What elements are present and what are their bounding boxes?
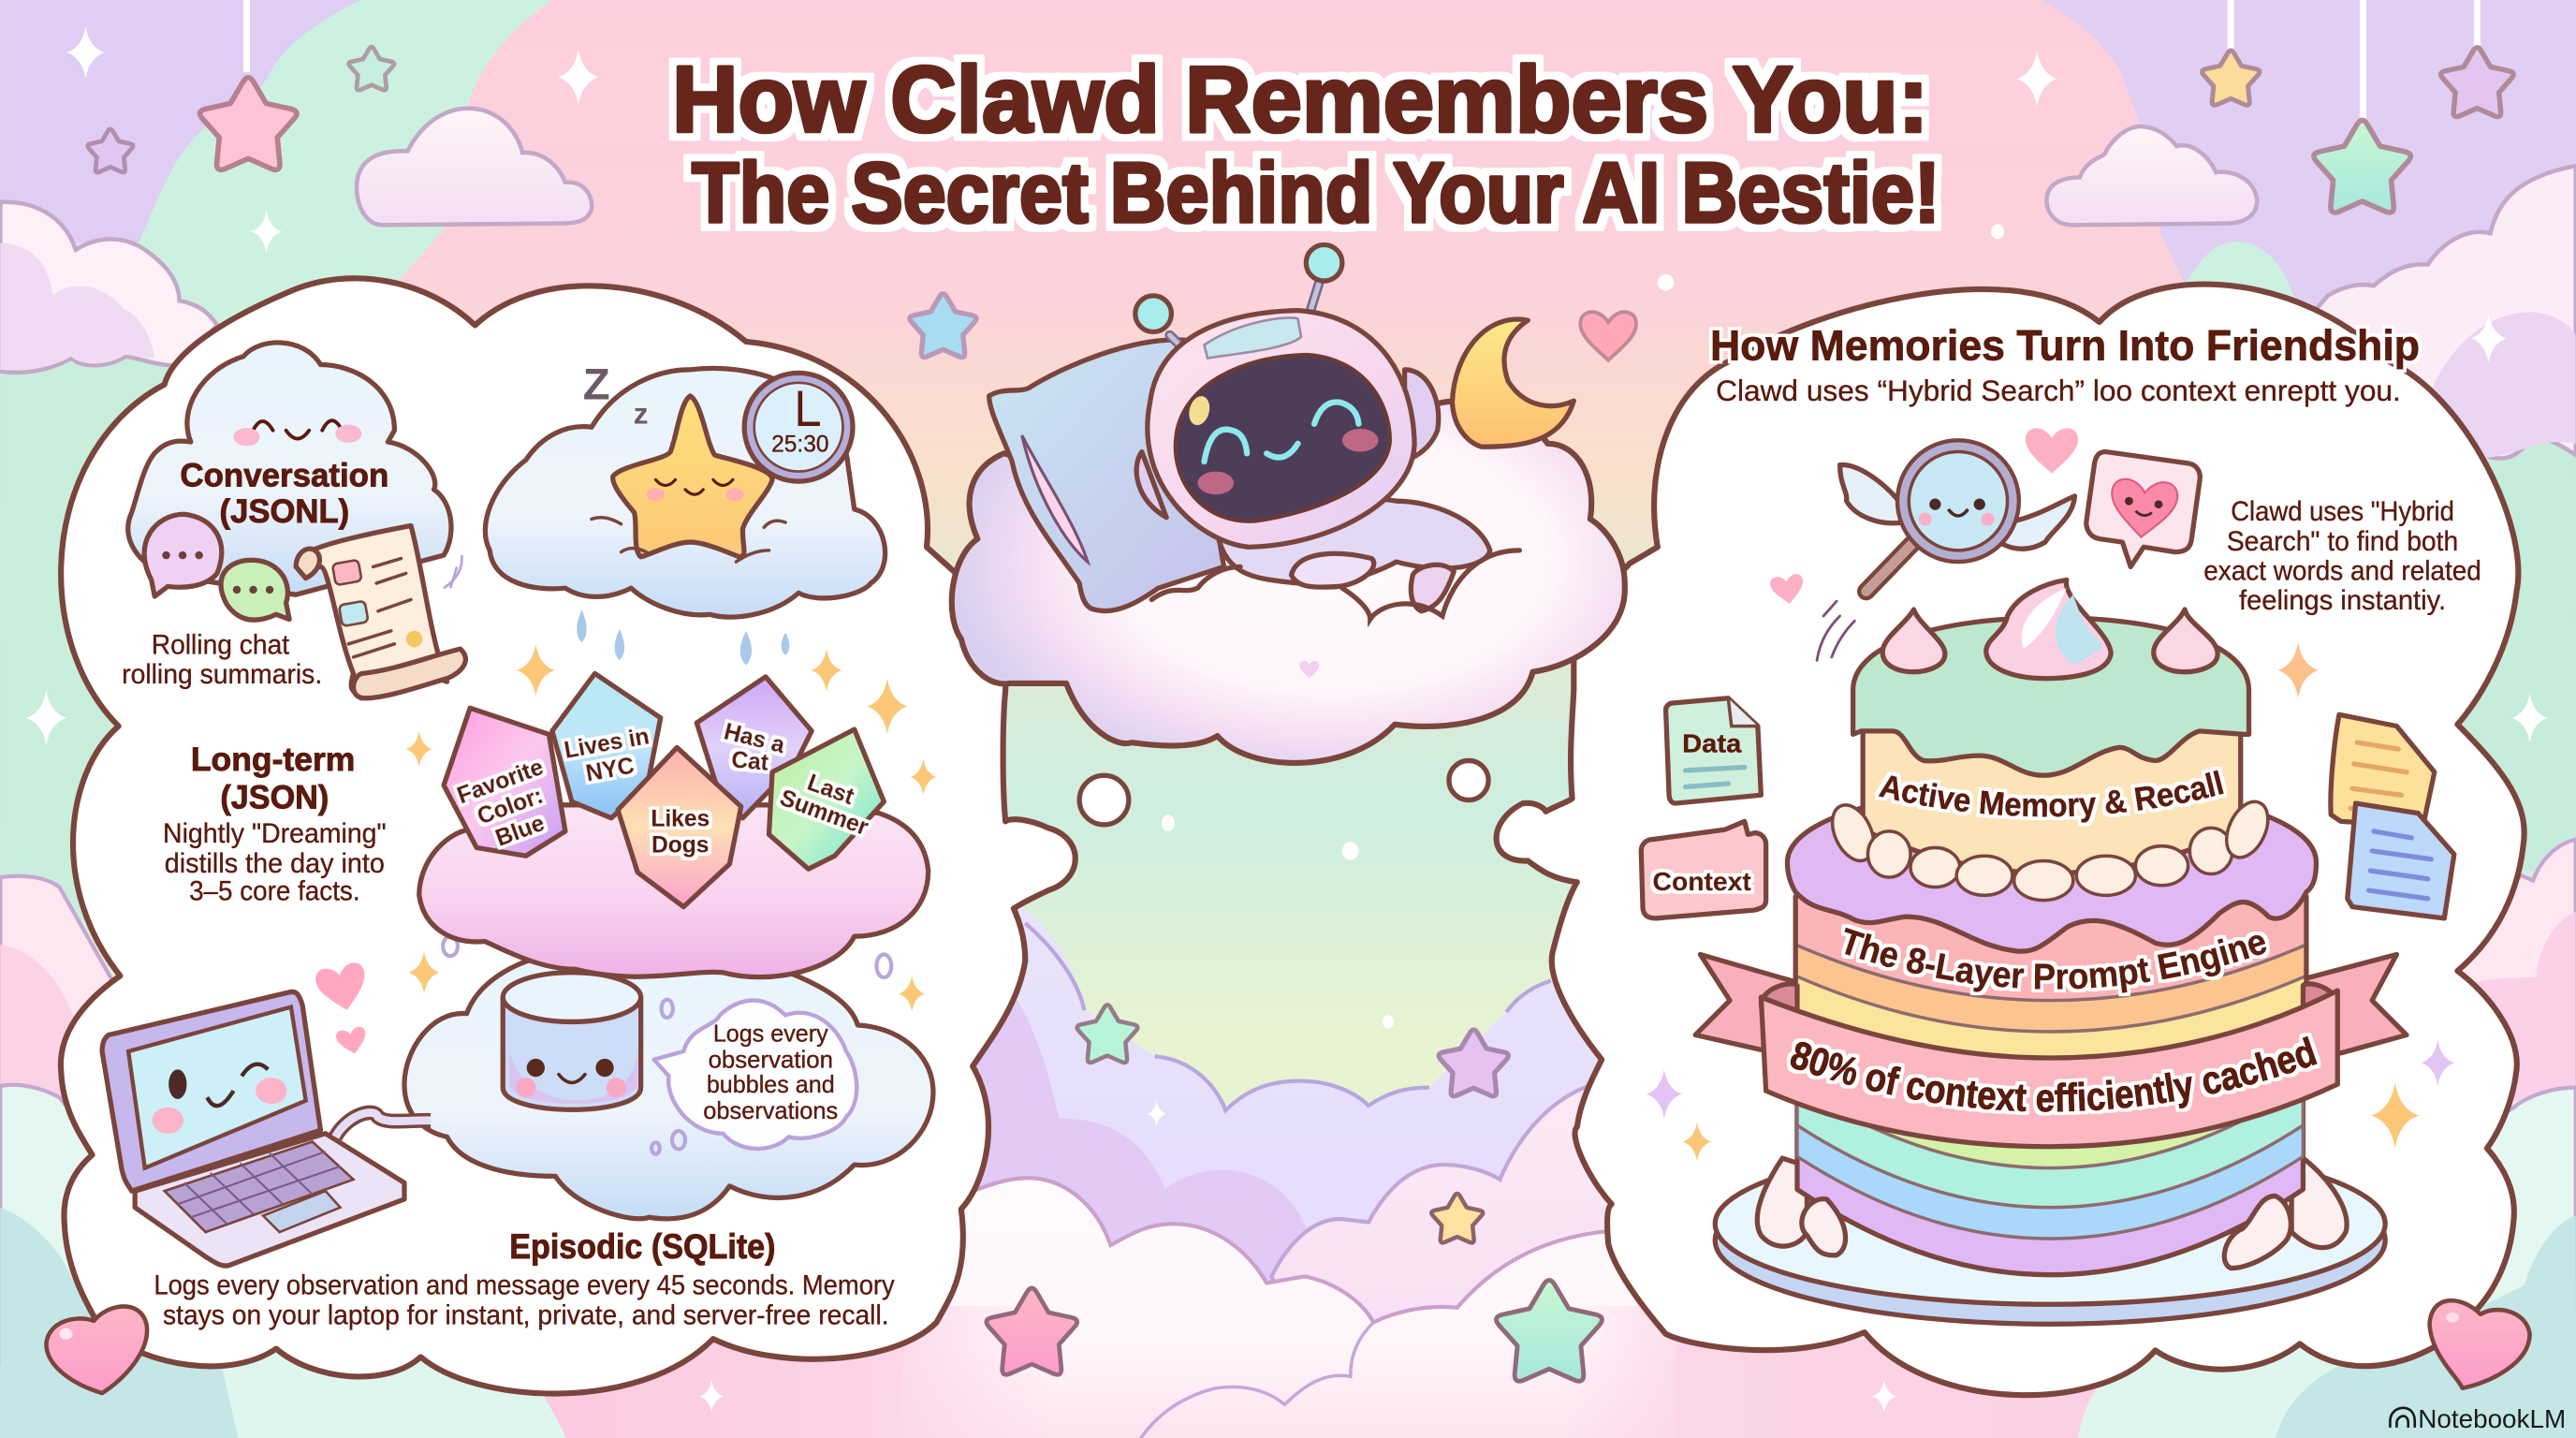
- icon: robot ear: [1136, 370, 1439, 518]
- icon: context bubble: Context: [1653, 867, 1751, 896]
- icon: robot body: [1216, 498, 1490, 611]
- cream tier: [1863, 707, 2241, 873]
- icon: sleep z: [583, 360, 649, 431]
- card: database cloud: [404, 936, 933, 1219]
- icon: clock: 25:30: [771, 433, 829, 458]
- panel: how memories turn into friendship (right thought cloud): [1458, 281, 2532, 1399]
- heading: friendship: How Memories Turn Into Friendship: [1710, 321, 2420, 369]
- icon: yellow document: [2331, 714, 2435, 827]
- text: episodic: Logs every observation and message every 45 seconds. Memory: [154, 1270, 895, 1301]
- text: episodic: [154, 1227, 895, 1330]
- frosting dollops at base: [1802, 1196, 2291, 1269]
- icon: scroll: [296, 526, 465, 698]
- text: episodic: stays on your laptop for instant, private, and server-free recall.: [163, 1299, 889, 1330]
- icon: motion lines: [1817, 601, 1854, 660]
- cake label: prompt engine: The 8-Layer Prompt Engine: [1840, 924, 2270, 996]
- callout: logs bubble: observations: [703, 1098, 838, 1124]
- crystal: has a cat: Has a: [722, 719, 787, 758]
- icon: context bubble: [1641, 821, 1766, 918]
- icon: crescent moon: [1452, 319, 1573, 447]
- icon: bubbles: [443, 936, 891, 1154]
- title: The Secret Behind Your AI Bestie!: [692, 145, 1940, 241]
- sparkles around cake: [1647, 642, 2454, 1162]
- icon: robot antennas: [1135, 244, 1342, 365]
- icon: database cylinder: [503, 973, 641, 1109]
- central bubbles: [1079, 760, 1488, 825]
- sparkles top: [66, 26, 2057, 1028]
- crystal: favorite color blue: Blue: [492, 811, 548, 852]
- icon: magnifier with wings: [1840, 440, 2075, 592]
- text: hybrid search: exact words and related: [2203, 555, 2481, 586]
- star: small mint: [349, 47, 394, 90]
- icon: heart speech bubble: [2086, 452, 2200, 566]
- card: pink memory cloud: [419, 805, 929, 977]
- icon: chat bubble lilac: [144, 514, 222, 596]
- cloud front outline: [1151, 550, 1519, 620]
- icon: sleep z: z: [634, 397, 649, 431]
- icon: sleeping star: [592, 396, 785, 562]
- ribbon tails: [1695, 954, 2407, 1053]
- cloud: right edge: [2300, 166, 2576, 459]
- icon: rain: [577, 609, 789, 666]
- heading: jsonl: (JSONL): [220, 493, 349, 530]
- cake plate: [1715, 1143, 2385, 1324]
- text: hybrid search: Search" to find both: [2227, 526, 2458, 557]
- sparkles: gold: [406, 644, 936, 1012]
- text: long-term: Long-term: [191, 741, 355, 778]
- text: hybrid search: feelings instantiy.: [2239, 585, 2446, 616]
- card: conversation cloud: [122, 343, 465, 698]
- ribbon label: context cached: 80% of context efficiently cached: [1787, 1033, 2321, 1116]
- icon: large heart right: [2430, 1300, 2530, 1388]
- text: hybrid search: [2203, 496, 2481, 616]
- callout: logs bubble: bubbles and: [707, 1072, 835, 1098]
- cloud: top-left small: [357, 109, 592, 225]
- cloud shade on right: [2415, 312, 2576, 460]
- cloud: top-right small: [2046, 126, 2257, 225]
- bottom cake layers: [1797, 986, 2303, 1275]
- crystal: has a cat: Cat: [730, 748, 769, 776]
- cake label: active memory: Active Memory & Recall: [1875, 767, 2228, 826]
- icon: heart: [2026, 428, 2078, 474]
- centre floating stars: [910, 294, 1636, 1381]
- panel: memory layers (left thought cloud): [61, 278, 1076, 1394]
- middle cake layers: [1795, 888, 2306, 1084]
- frills: [1824, 795, 2276, 901]
- crystal: favorite color blue: [444, 708, 565, 856]
- notebooklm logo: NotebookLM: [2418, 1404, 2566, 1433]
- crystal: favorite color blue: Favorite: [454, 755, 547, 809]
- text: long-term: Nightly "Dreaming": [163, 818, 387, 849]
- lavender frosting: [1787, 785, 2316, 951]
- icon: robot head: [1148, 311, 1414, 547]
- crystal: lives in nyc: Lives in: [563, 724, 651, 764]
- icon: tiny heart: [1299, 661, 1319, 678]
- icon: blue document: [2348, 803, 2454, 918]
- star: small purple: [88, 129, 133, 172]
- text: long-term: [163, 741, 387, 907]
- ribbon banner: [1761, 984, 2337, 1147]
- callout: logs bubble: Logs every: [713, 1020, 828, 1047]
- title: [672, 47, 1940, 241]
- hanging star: pink: [200, 0, 297, 169]
- icon: pillow: [989, 340, 1224, 611]
- crystal: last summer: [769, 729, 884, 869]
- crystal: likes dogs: Likes: [651, 807, 710, 832]
- callout: logs bubble: observation: [709, 1048, 833, 1074]
- icon: data document: Data: [1682, 729, 1742, 758]
- icon: chat bubble green: [221, 560, 289, 620]
- heading: conversation: Conversation: [180, 457, 388, 493]
- crystal: likes dogs: Dogs: [651, 833, 709, 858]
- text: rolling chat: rolling summaris.: [122, 659, 322, 690]
- crystal: last summer: Last: [804, 770, 857, 810]
- text: long-term: (JSON): [220, 779, 329, 815]
- text: rolling chat: Rolling chat: [152, 629, 290, 660]
- crystal: favorite color blue: Color:: [475, 783, 547, 830]
- crystal: lives in nyc: [552, 673, 661, 818]
- rear frosting dollops: [1757, 1158, 2347, 1248]
- icon: laptop: [102, 991, 431, 1266]
- callout: logs bubble: [654, 1001, 856, 1149]
- icon: sleep z: Z: [583, 360, 610, 409]
- icon: small heart: [1769, 573, 1806, 606]
- mint frosting: [1853, 618, 2249, 775]
- text: episodic: Episodic (SQLite): [509, 1227, 776, 1266]
- icon: data document: [1666, 698, 1761, 803]
- crystal: has a cat: [696, 677, 812, 818]
- icon: clock: [744, 373, 853, 481]
- card: dreaming star cloud: [485, 360, 886, 666]
- text: long-term: distills the day into: [165, 848, 385, 879]
- meringue topping: [1882, 580, 2217, 679]
- central cloud with sleeping robot: [952, 244, 1625, 763]
- cloud: left edge: [0, 202, 217, 373]
- icon: robot face screen: [1176, 355, 1390, 521]
- crystal: likes dogs: [618, 747, 741, 907]
- text: long-term: 3–5 core facts.: [189, 876, 360, 907]
- chart: layered cake: [1692, 577, 2409, 1327]
- crystal: lives in nyc: NYC: [584, 754, 637, 786]
- title: How Clawd Remembers You:: [672, 47, 1928, 152]
- icon: large heart left: [46, 1306, 147, 1393]
- icon: hearts: [314, 961, 372, 1057]
- icon: cloud face: [233, 420, 361, 446]
- crystal: last summer: Summer: [776, 785, 871, 841]
- text: subhead: Clawd uses “Hybrid Search” loo context enreptt you.: [1716, 374, 2401, 407]
- cloud: [952, 401, 1625, 763]
- clouds: lower centre: [871, 888, 1708, 1438]
- text: hybrid search: Clawd uses "Hybrid: [2231, 496, 2454, 527]
- text: rolling chat: [122, 629, 322, 690]
